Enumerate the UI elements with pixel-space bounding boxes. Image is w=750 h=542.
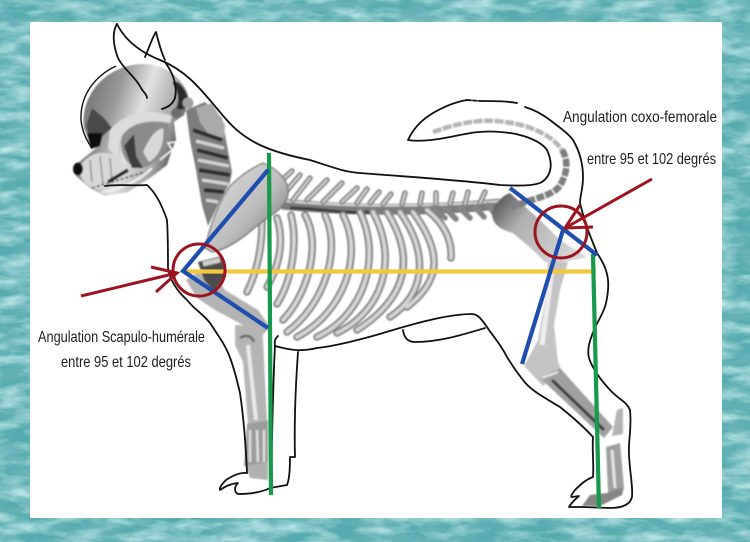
spine xyxy=(280,171,500,219)
label: coxo-femoral angulation xyxy=(563,109,717,168)
front red arrow xyxy=(81,267,177,296)
neck vertebrae xyxy=(186,102,232,226)
back and tail xyxy=(117,24,632,508)
front green vertical xyxy=(269,153,271,495)
front red circle xyxy=(173,244,225,296)
yellow horizontal line xyxy=(184,269,596,274)
humerus and forearm xyxy=(186,256,270,480)
tail bones xyxy=(433,121,566,207)
label: scapulo-humeral angulation xyxy=(38,329,205,371)
label: coxo-femoral angulation: Angulation coxo-femorale xyxy=(563,109,717,126)
label: scapulo-humeral angulation: entre 95 et 102 degrés xyxy=(61,354,191,371)
skeleton xyxy=(73,64,624,506)
ribs xyxy=(247,210,451,337)
front blue angle xyxy=(183,170,268,328)
hind leg inner line and belly xyxy=(275,314,593,437)
rear red circle xyxy=(535,206,587,258)
rear blue angle xyxy=(510,188,597,364)
label: coxo-femoral angulation: entre 95 et 102 degrés xyxy=(587,151,716,168)
muzzle to chest and front leg xyxy=(105,185,247,473)
rear angle marker xyxy=(535,179,652,258)
label: scapulo-humeral angulation: Angulation Scapulo-humérale xyxy=(38,329,205,346)
skull xyxy=(73,64,194,196)
rear green vertical xyxy=(593,254,599,508)
pelvis xyxy=(492,193,587,263)
scapula xyxy=(205,163,288,252)
angulation lines xyxy=(183,153,599,508)
ears xyxy=(114,24,147,98)
skull contour highlight xyxy=(81,66,116,148)
rear red arrow xyxy=(565,179,652,228)
dog illustration xyxy=(73,24,632,508)
body outline xyxy=(105,24,632,508)
front angle marker xyxy=(81,244,225,296)
hind leg bones xyxy=(524,262,624,506)
